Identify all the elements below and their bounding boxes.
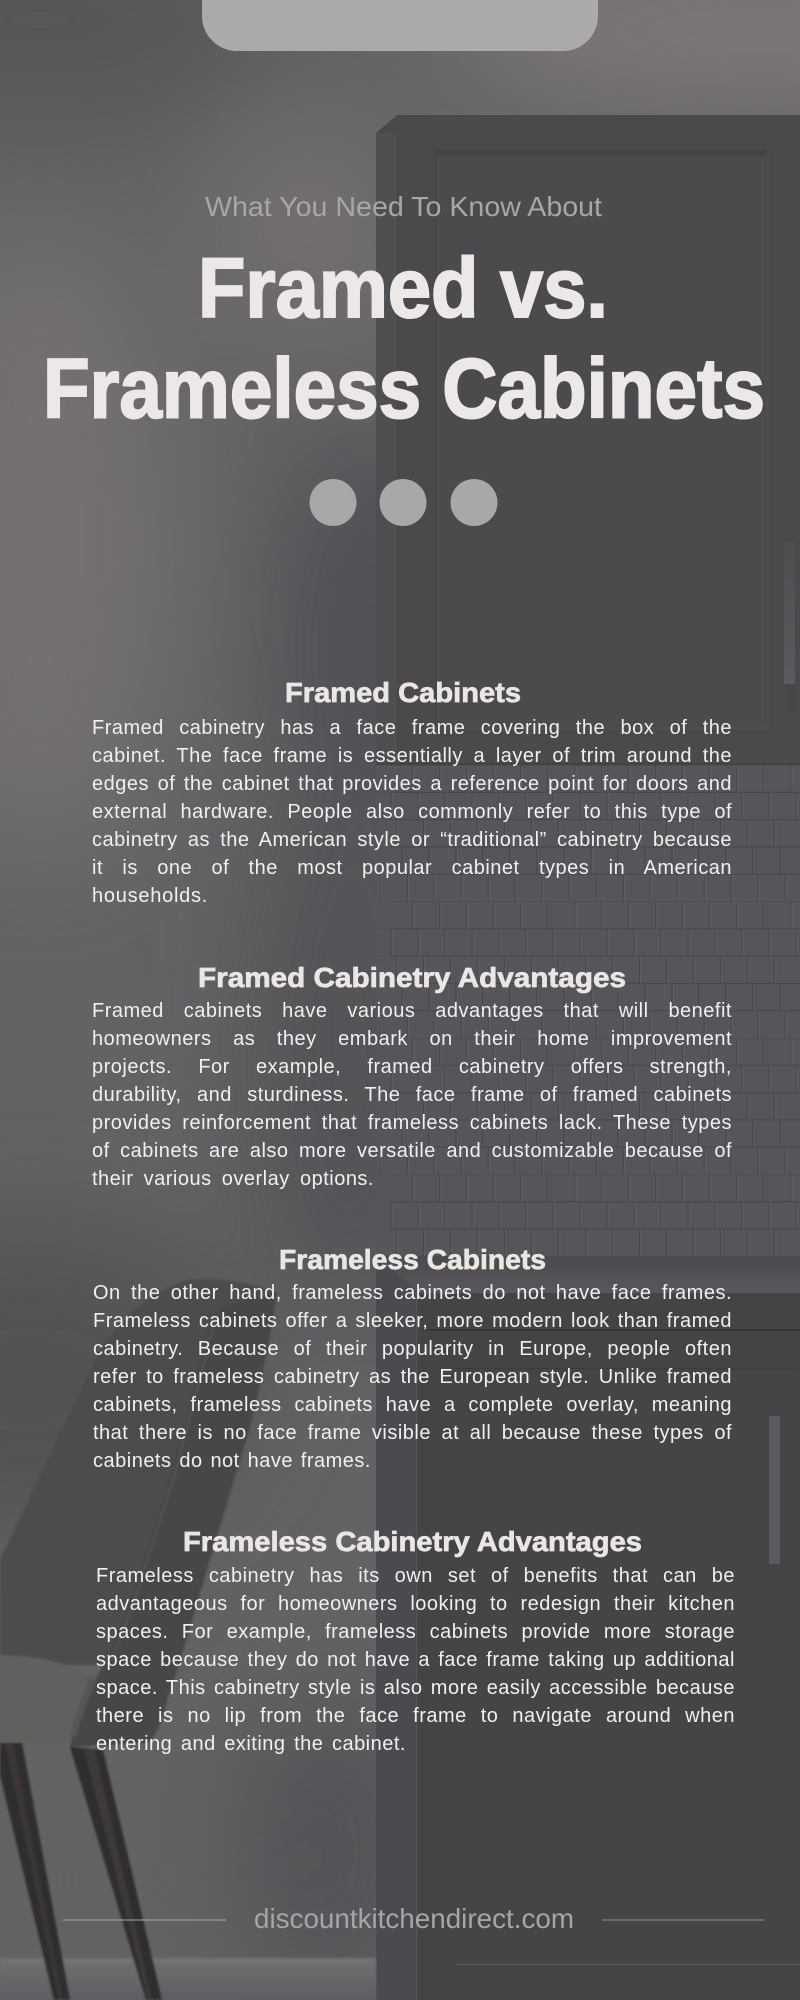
shell seam <box>112 1315 216 1660</box>
text block <box>93 1282 732 1472</box>
text block: external hardware. People also commonly refer to this type of <box>92 801 732 823</box>
title block <box>43 191 765 526</box>
text block <box>92 1000 732 1190</box>
panel: framed cabinets <box>92 677 732 907</box>
chair legs <box>0 1743 70 2000</box>
heading: Framed Cabinets <box>285 677 521 708</box>
website: discountkitchendirect.com <box>254 1903 574 1934</box>
text block: space because they do not have a face frame taking up additional <box>96 1648 735 1670</box>
text block: durability, and sturdiness. The face frame of framed cabinets <box>92 1084 732 1106</box>
heading: Frameless Cabinetry Advantages <box>183 1526 642 1557</box>
text block: of cabinets are also more versatile and customizable because of <box>92 1140 732 1162</box>
text block: their various overlay options. <box>92 1168 374 1190</box>
baseboard <box>0 1958 376 2000</box>
text block: Frameless cabinetry has its own set of benefits that can be <box>96 1564 735 1586</box>
tiled backsplash <box>376 765 800 1256</box>
text block: Framed cabinets have various advantages that will benefit <box>92 1000 732 1022</box>
panel: frameless cabinets <box>93 1244 732 1472</box>
text block: spaces. For example, frameless cabinets provide more storage <box>96 1620 735 1642</box>
chair back fabric <box>0 1279 277 1665</box>
text block: cabinetry. Because of their popularity in Europe, people often <box>93 1338 732 1360</box>
heading: Framed Cabinetry Advantages <box>198 962 626 993</box>
text block: cabinets, frameless cabinets have a complete overlay, meaning <box>93 1394 732 1416</box>
text block: cabinet. The face frame is essentially a layer of trim around the <box>92 745 732 767</box>
top pill decoration <box>202 0 598 51</box>
text block: provides reinforcement that frameless cabinets lack. These types <box>92 1112 732 1134</box>
text block: refer to frameless cabinetry as the European style. Unlike framed <box>93 1366 732 1388</box>
main title <box>43 241 765 436</box>
text block: it is one of the most popular cabinet types in American <box>92 857 732 879</box>
text block: cabinets do not have frames. <box>93 1450 371 1472</box>
text block: projects. For example, framed cabinetry offers strength, <box>92 1056 732 1078</box>
panel: framed cabinetry advantages <box>92 962 732 1190</box>
upper cabinet <box>376 115 800 765</box>
text block: households. <box>92 885 208 907</box>
chair back shell <box>70 1293 277 1747</box>
text block: Frameless cabinets offer a sleeker, more modern look than framed <box>93 1310 732 1332</box>
text block: space. This cabinetry style is also more easily accessible because <box>96 1676 735 1698</box>
text block: that there is no face frame visible at all because these types of <box>93 1422 732 1444</box>
panel: frameless cabinetry advantages <box>96 1526 735 1754</box>
text block: On the other hand, frameless cabinets do not have face frames. <box>93 1282 732 1304</box>
main title: Framed vs. <box>198 241 608 335</box>
text block: homeowners as they embark on their home improvement <box>92 1028 732 1050</box>
footer rule left <box>63 1920 226 1921</box>
text block <box>96 1564 735 1754</box>
text block: there is no lip from the face frame to navigate around when <box>96 1704 735 1726</box>
chair seat <box>0 1655 90 1746</box>
footer rule right <box>602 1920 764 1921</box>
lower cabinet <box>376 1256 800 2000</box>
text block: advantageous for homeowners looking to redesign their kitchen <box>96 1592 735 1614</box>
heading: Frameless Cabinets <box>279 1244 546 1275</box>
text block: Framed cabinetry has a face frame covering the box of the <box>92 717 732 739</box>
text block: edges of the cabinet that provides a reference point for doors and <box>92 773 732 795</box>
chair <box>0 1279 277 2000</box>
subtitle: What You Need To Know About <box>205 191 602 222</box>
text block: entering and exiting the cabinet. <box>96 1732 406 1754</box>
text block <box>92 717 732 907</box>
text block: cabinetry as the American style or “traditional” cabinetry because <box>92 829 732 851</box>
three dots <box>310 479 498 526</box>
